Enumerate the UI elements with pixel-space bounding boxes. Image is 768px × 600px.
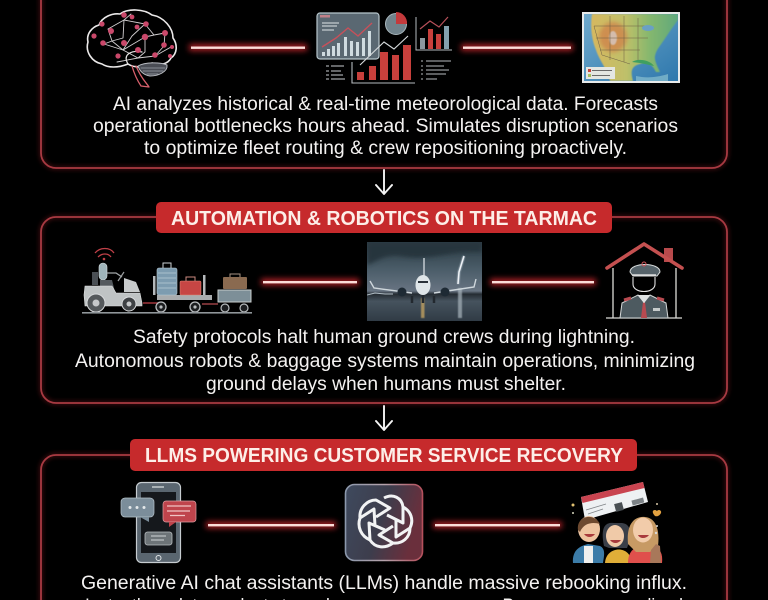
icon: phone with chat bubbles: [121, 482, 196, 562]
panel: automation and robotics: [41, 202, 727, 403]
connector line: [490, 278, 596, 286]
body text: predictive analytics: to optimize fleet routing & crew repositioning proactively.: [144, 138, 627, 159]
heading badge: automation: [156, 202, 612, 233]
body text: predictive analytics: operational bottlenecks hours ahead. Simulates disruption scenarios: [93, 116, 678, 137]
connector line: [433, 522, 562, 528]
body text: automation: ground delays when humans must shelter.: [206, 374, 566, 395]
body text: automation: [75, 327, 695, 395]
heading badge: automation: AUTOMATION & ROBOTICS ON THE TARMAC: [171, 208, 597, 230]
connector line: [189, 44, 307, 51]
body text: LLMs: Generative AI chat assistants (LLMs) handle massive rebooking influx.: [81, 573, 687, 594]
connector line: [461, 44, 573, 51]
body text: automation: Autonomous robots & baggage systems maintain operations, minimizing: [75, 351, 695, 372]
icon: neural brain: [87, 10, 176, 87]
icon: LLM app knot logo: [346, 484, 422, 560]
heading badge: LLMs: [130, 439, 637, 471]
icon: analytics dashboard: [317, 12, 452, 83]
body text: predictive analytics: [93, 94, 678, 159]
arrow: down to LLMs: [376, 406, 392, 430]
connector line: [261, 278, 359, 286]
body text: automation: Safety protocols halt human ground crews during lightning.: [133, 327, 635, 348]
body text: predictive analytics: AI analyzes historical & real-time meteorological data. Forecasts: [113, 94, 658, 115]
icon: US weather map: [582, 12, 680, 83]
arrow: down to automation: [376, 170, 392, 194]
connector line: [206, 522, 336, 528]
panel: LLM customer service recovery: [41, 439, 727, 600]
icon: happy travellers with boarding pass: [572, 482, 662, 563]
icon: crew member sheltered in house: [606, 244, 682, 318]
image: airliner on wet apron in lightning storm: [367, 242, 482, 321]
panel: predictive analytics: [41, 0, 727, 168]
heading badge: LLMs: LLMS POWERING CUSTOMER SERVICE RECOVERY: [145, 445, 624, 467]
icon: robotic baggage tractor: [82, 248, 252, 314]
